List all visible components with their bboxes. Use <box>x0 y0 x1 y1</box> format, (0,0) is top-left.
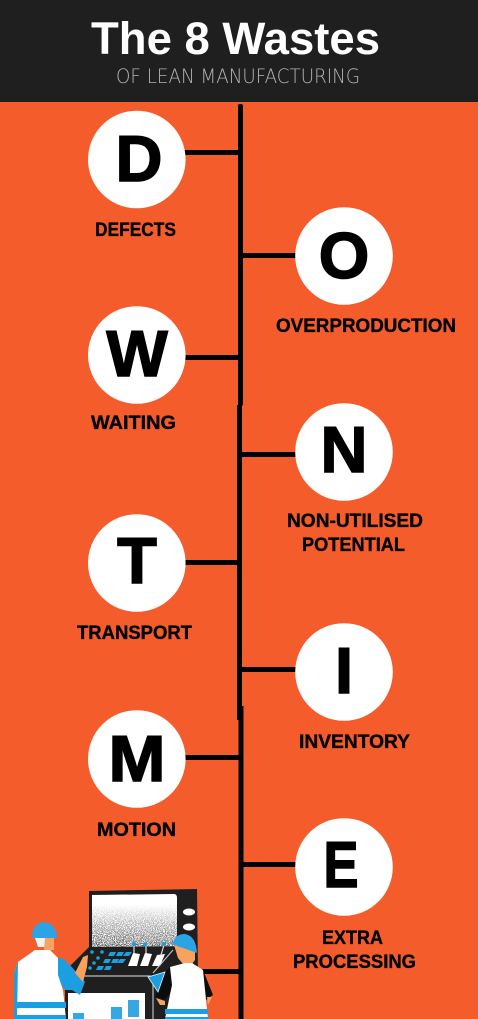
timeline spine <box>237 104 244 1019</box>
item: transport <box>77 514 240 644</box>
item: overproduction: OVERPRODUCTION <box>276 316 456 337</box>
item: motion: M <box>108 722 166 795</box>
item: transport: T <box>117 524 157 597</box>
item: non-utilised potential: NON-UTILISED <box>287 511 423 532</box>
title: The 8 Wastes <box>91 13 380 64</box>
item: waiting <box>88 306 240 434</box>
machine buttons <box>88 942 166 970</box>
connector to spine <box>195 969 240 974</box>
item: inventory <box>240 623 410 753</box>
item: extra processing: EXTRA <box>322 928 383 949</box>
item: extra processing: PROCESSING <box>293 952 416 973</box>
item: extra processing: E <box>324 828 358 901</box>
machine knobs <box>183 908 195 916</box>
item: non-utilised potential: N <box>321 413 367 486</box>
left worker <box>14 922 88 1019</box>
item: overproduction: O <box>319 219 369 292</box>
item: inventory: I <box>335 634 353 707</box>
item: extra processing <box>240 818 416 973</box>
machine screen <box>92 894 177 947</box>
machine front panel <box>68 993 145 1019</box>
subtitle: OF LEAN MANUFACTURING <box>116 65 360 88</box>
item: non-utilised potential <box>240 403 423 556</box>
item: waiting: W <box>106 317 168 390</box>
illustration: workers at machine <box>14 889 240 1019</box>
item: motion <box>88 710 240 841</box>
item: motion: MOTION <box>97 820 176 841</box>
item: inventory: INVENTORY <box>299 732 410 753</box>
item: overproduction <box>240 207 456 337</box>
header band <box>0 0 478 102</box>
machine body <box>65 889 198 1019</box>
item: transport: TRANSPORT <box>77 623 192 644</box>
right worker <box>148 934 213 1019</box>
item: defects <box>88 111 240 241</box>
item: defects: D <box>116 122 162 195</box>
machine levers <box>128 944 165 966</box>
item: defects: DEFECTS <box>95 220 176 241</box>
item: non-utilised potential: POTENTIAL <box>302 535 405 556</box>
item: waiting: WAITING <box>91 413 176 434</box>
